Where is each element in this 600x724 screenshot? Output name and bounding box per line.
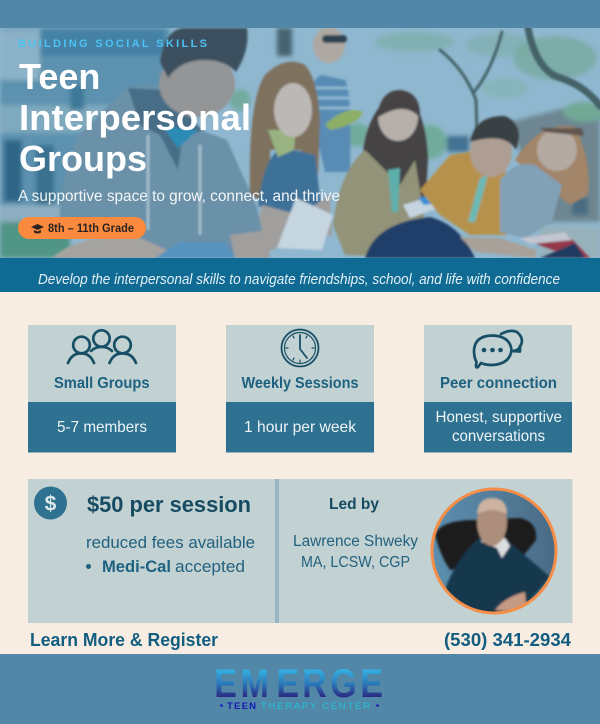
- card: weekly sessions: [226, 325, 374, 452]
- leader details: Led by: [329, 496, 379, 513]
- icon: dollar coin: [34, 486, 67, 520]
- leader details: [293, 496, 418, 571]
- leader portrait: [430, 488, 560, 615]
- girl in denim jacket: [250, 62, 320, 205]
- colour overlay: [0, 28, 600, 258]
- icon: dollar coin: $: [45, 492, 57, 516]
- card: peer connection: Peer connection: [440, 375, 557, 392]
- main title: Interpersonal: [19, 97, 251, 138]
- tree canopy: [375, 32, 455, 52]
- learn more link: Learn More & Register: [30, 630, 218, 650]
- pricing text: reduced fees available: [86, 533, 255, 552]
- top band: [0, 0, 600, 28]
- card: peer connection: conversations: [452, 428, 545, 445]
- tagline strip: [0, 258, 600, 292]
- pricing text: accepted: [175, 557, 245, 576]
- leader details: MA, LCSW, CGP: [301, 554, 410, 571]
- card: small groups: 5-7 members: [57, 419, 147, 436]
- subtitle: A supportive space to grow, connect, and thrive: [18, 188, 340, 205]
- icon: chat bubbles: [474, 331, 522, 367]
- main title: [19, 56, 251, 179]
- card: small groups: Small Groups: [54, 375, 150, 392]
- hero photo: group of smiling teens outdoors: [0, 27, 600, 258]
- grade badge: 8th – 11th Grade: [48, 221, 134, 235]
- card: peer connection: Honest, supportive: [436, 409, 562, 426]
- boy standing with sunglasses: [310, 75, 350, 172]
- building on right: [510, 108, 600, 222]
- boy in orange jacket: [420, 150, 510, 235]
- card: small groups: [28, 325, 176, 452]
- card: peer connection: [424, 325, 572, 452]
- tagline strip: Develop the interpersonal skills to navigate friendships, school, and life with confidence: [38, 272, 560, 288]
- pricing text: [86, 492, 255, 576]
- card: weekly sessions: Weekly Sessions: [242, 375, 358, 392]
- icon: clock: [282, 330, 318, 366]
- main title: Groups: [19, 138, 147, 179]
- panel: pricing and leader: [28, 479, 572, 623]
- logo: Emerge Teen Therapy Center: TEEN: [227, 701, 256, 712]
- blonde girl in denim jacket: [515, 126, 589, 205]
- logo: Emerge Teen Therapy Center: THERAPY CENTER: [261, 701, 370, 712]
- laughing girl in tan jacket: [362, 108, 430, 198]
- phone number: (530) 341-2934: [444, 630, 571, 650]
- footer band: [0, 654, 600, 724]
- icon: graduation cap: [31, 224, 44, 234]
- leader details: Lawrence Shweky: [293, 533, 418, 550]
- card: weekly sessions: 1 hour per week: [244, 419, 357, 436]
- pricing text: $50 per session: [87, 492, 251, 517]
- logo: Emerge Teen Therapy Center: EMERGE: [214, 660, 383, 706]
- main boy in grey hoodie: [60, 85, 268, 258]
- eyebrow label: BUILDING SOCIAL SKILLS: [18, 38, 207, 50]
- main title: Teen: [19, 56, 100, 97]
- pricing text: Medi-Cal: [102, 557, 171, 576]
- background trees: [229, 89, 251, 111]
- icon: three people: [68, 330, 136, 363]
- paper held by girl: [277, 198, 333, 250]
- grade badge: [18, 217, 146, 239]
